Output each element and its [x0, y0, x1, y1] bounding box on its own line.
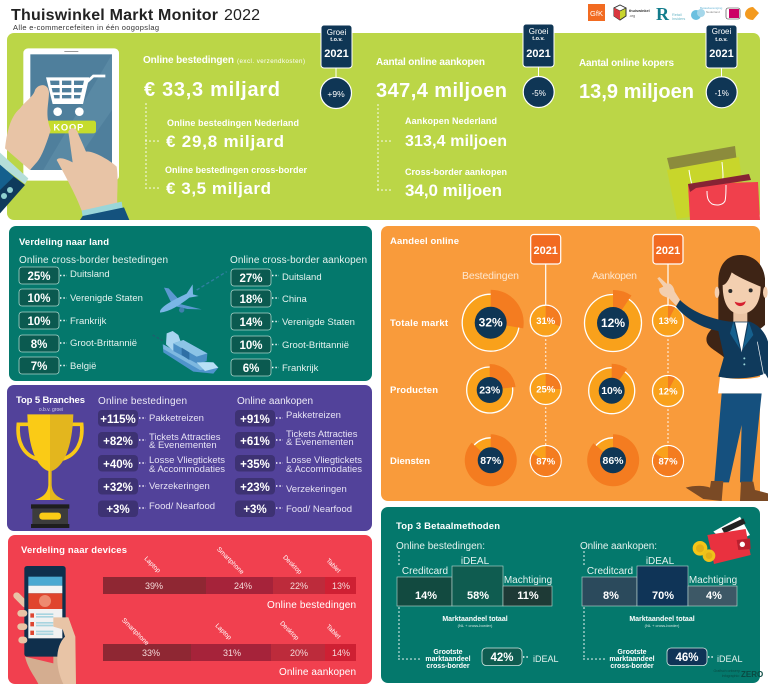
- shirt hem: [718, 376, 763, 393]
- badge: growth spending +9%: t.o.v.: [330, 37, 343, 43]
- text: online spending: Online bestedingen Nederland: [167, 118, 299, 128]
- bar chart: purchases: 31%: [223, 648, 241, 658]
- right column: +3%: [243, 504, 267, 516]
- heading: Top 5 Branches: [16, 395, 85, 406]
- left column: Tickets Attracties: [149, 432, 221, 443]
- panel: distribution by device: [8, 535, 372, 684]
- text: online purchases: [376, 57, 507, 200]
- partner logos: R: [656, 4, 670, 24]
- right column: Online cross-border aankopen: [230, 255, 367, 266]
- donut: producten aankopen 10%: [589, 364, 635, 414]
- heading: Aandeel online: [390, 236, 459, 247]
- right column: Online aankopen: [237, 396, 313, 407]
- donut: diensten bestedingen 87%: 87%: [480, 455, 502, 467]
- left column: 8%: [31, 339, 47, 351]
- panel: online spending and buyers: [0, 24, 760, 220]
- bar chart: spending: Smartphone: [215, 546, 245, 576]
- chart: payment purchases: (NL + cross-border): [645, 623, 680, 628]
- chart: payment purchases: Creditcard: [587, 566, 633, 577]
- chart: payment purchases: 8%: [603, 590, 619, 602]
- badge: growth purchases -5%: -5%: [532, 89, 546, 98]
- donut: totale markt bestedingen 32%: 32%: [479, 316, 503, 330]
- donut: producten bestedingen 23%: 23%: [479, 384, 501, 396]
- badge: growth purchases -5%: [523, 24, 554, 108]
- left column: Online bestedingen: [98, 396, 187, 407]
- donut: producten 2021 12%: [652, 376, 684, 406]
- right column: +23%: [240, 482, 270, 494]
- right column: China: [282, 294, 308, 305]
- chart: payment spending: 11%: [517, 590, 539, 602]
- face: [723, 272, 761, 314]
- bar chart: purchases: Smartphone: [120, 617, 150, 647]
- bar chart: purchases: 20%: [290, 648, 308, 658]
- left column: Losse Vliegtickets: [149, 455, 225, 466]
- bar chart: spending: 13%: [332, 581, 350, 591]
- chart: payment purchases: Online aankopen:: [580, 541, 657, 552]
- donut: totale markt aankopen 12%: [584, 290, 642, 352]
- bar chart: spending: Online bestedingen: [267, 600, 356, 611]
- icon: trophy: [18, 414, 82, 528]
- partner logos: .org: [629, 14, 635, 18]
- chart: payment spending: Machtiging: [504, 575, 552, 586]
- text: online spending: € 33,3 miljard: [144, 79, 280, 101]
- text: online buyers: [579, 58, 694, 103]
- right sleeve: [80, 207, 129, 220]
- right column: +61%: [240, 436, 270, 448]
- badge: 2021 aankopen: 2021: [656, 245, 680, 257]
- icon: tablet with hands: [0, 48, 129, 220]
- donut: producten aankopen 10%: 10%: [601, 385, 623, 397]
- bar chart: purchases: 14%: [332, 648, 350, 658]
- donut: producten 2021 12%: 12%: [658, 386, 678, 398]
- chart: payment purchases: marktaandeel: [609, 656, 655, 663]
- right column: [230, 255, 367, 376]
- badge: growth spending +9%: 2021: [324, 48, 349, 60]
- left column: Online cross-border bestedingen: [19, 255, 168, 266]
- donut: totale markt 2021 31%: [530, 305, 561, 336]
- chart: payment spending: [396, 541, 559, 670]
- chart: payment spending: Marktaandeel totaal: [442, 616, 508, 623]
- left column: Food/ Nearfood: [149, 501, 215, 512]
- badge: growth buyers -1%: t.o.v.: [715, 37, 728, 43]
- right column: 6%: [243, 363, 259, 375]
- left column: [98, 396, 225, 517]
- chart: payment purchases: 70%: [652, 590, 674, 602]
- left column: +3%: [106, 504, 130, 516]
- text: online purchases: 347,4 miljoen: [376, 80, 507, 102]
- heading: [16, 395, 85, 413]
- donut: producten 2021 25%: [530, 374, 561, 404]
- left column: Frankrijk: [70, 316, 107, 327]
- hair: [706, 255, 765, 358]
- icon: airplane: [160, 272, 227, 313]
- chart: payment spending: Creditcard: [402, 566, 448, 577]
- text: online buyers: 13,9 miljoen: [579, 81, 694, 103]
- bar chart: spending: 24%: [234, 581, 252, 591]
- left column: +40%: [103, 459, 133, 471]
- left hand: [5, 85, 51, 170]
- left column: +32%: [103, 482, 133, 494]
- lapels: [730, 322, 753, 349]
- right column: 14%: [239, 317, 263, 329]
- panel: online share: [381, 226, 768, 501]
- text: online spending: € 3,5 miljard: [166, 179, 271, 198]
- donut: producten bestedingen 23%: [467, 364, 516, 413]
- right cuff: [82, 202, 123, 217]
- left column: 25%: [27, 271, 51, 283]
- badge: 2021 bestedingen: [531, 234, 561, 264]
- badge: growth purchases -5%: 2021: [526, 48, 551, 60]
- right column: 18%: [239, 294, 263, 306]
- partner logos: Nederland: [706, 10, 720, 14]
- bar chart: spending: 22%: [290, 581, 308, 591]
- left column: & Evenementen: [149, 440, 217, 451]
- chart: payment purchases: Grootste: [617, 649, 647, 656]
- badge: growth buyers -1%: Groei: [712, 27, 732, 36]
- donut: diensten 2021 87% aankopen: 87%: [658, 456, 678, 468]
- bar chart: spending: Laptop: [143, 555, 162, 575]
- badge: growth buyers -1%: 2021: [709, 48, 734, 60]
- left sleeve: [0, 153, 28, 184]
- right column: Verzekeringen: [286, 484, 347, 495]
- text: online purchases: 313,4 miljoen: [405, 133, 507, 150]
- bar chart: purchases: [103, 617, 356, 678]
- credit: infographic designer: Grafisch ontwerp: [714, 669, 740, 673]
- row labels: Totale markt: [390, 318, 449, 329]
- shirt: [735, 322, 747, 352]
- connectors: [546, 264, 668, 305]
- text: online purchases: Aantal online aankopen: [376, 57, 485, 68]
- panel: top 3 payment methods: [381, 507, 763, 683]
- donut: diensten 2021 87%: [530, 446, 561, 476]
- partner logos: GfK: [590, 9, 603, 18]
- partner logos: Betaalvereniging: [700, 6, 723, 10]
- partner logos: Retail: [672, 13, 682, 17]
- icon: shopping bags: [667, 146, 760, 220]
- left column: Duitsland: [70, 269, 110, 280]
- text: online spending: Online bestedingen: [143, 55, 234, 66]
- panel: distribution by country: [9, 226, 372, 381]
- credit: infographic designer: ZERO: [741, 670, 763, 679]
- partner logos: Insiders: [672, 17, 685, 21]
- text: online purchases: Cross-border aankopen: [405, 167, 507, 177]
- left column: 7%: [31, 361, 47, 373]
- panel: top 5 branches: [7, 385, 372, 531]
- button: koop: KOOP: [53, 122, 83, 132]
- left column: +82%: [103, 436, 133, 448]
- right column: Verenigde Staten: [282, 317, 355, 328]
- right column: & Evenementen: [286, 437, 354, 448]
- chart: payment spending: (NL + cross-border): [458, 623, 493, 628]
- column labels: Bestedingen: [462, 270, 519, 282]
- right column: Pakketreizen: [286, 410, 341, 421]
- icon: hand holding phone: [17, 566, 76, 684]
- badge: growth buyers -1%: [706, 25, 737, 108]
- illustration: woman pointing: [657, 255, 768, 501]
- heading: o.b.v. groei: [39, 407, 63, 413]
- credit: infographic designer: [714, 669, 763, 679]
- row labels: Producten: [390, 385, 438, 396]
- bar chart: purchases: 33%: [142, 648, 160, 658]
- chart: payment spending: iDEAL: [533, 654, 559, 664]
- badge: growth spending +9%: +9%: [327, 89, 345, 99]
- left column: België: [70, 361, 96, 372]
- hand: [657, 277, 680, 306]
- neck: [733, 308, 747, 325]
- badge: growth purchases -5%: Groei: [529, 27, 549, 36]
- left column: [19, 255, 168, 374]
- column labels: Aankopen: [592, 270, 637, 282]
- icon: shopping cart: [46, 76, 105, 116]
- text: online purchases: Aankopen Nederland: [405, 116, 497, 126]
- donut: diensten 2021 87% aankopen: [652, 446, 684, 476]
- chart: payment purchases: cross-border: [610, 663, 654, 670]
- chart: payment spending: iDEAL: [461, 556, 490, 567]
- text: online spending: [143, 55, 307, 198]
- left column: 10%: [27, 293, 51, 305]
- jacket: [676, 300, 768, 378]
- donut: totale markt aankopen 12%: 12%: [601, 316, 625, 330]
- chart: payment spending: 42%: [490, 652, 514, 664]
- right column: Food/ Nearfood: [286, 504, 352, 515]
- text: online spending: € 29,8 miljard: [166, 132, 284, 151]
- chart: payment spending: marktaandeel: [425, 656, 471, 663]
- icon: container ship: [153, 331, 218, 374]
- chart: payment purchases: iDEAL: [646, 556, 675, 567]
- right column: Duitsland: [282, 272, 322, 283]
- right column: 10%: [239, 340, 263, 352]
- right column: & Accommodaties: [286, 464, 362, 475]
- donut: totale markt 2021 13%: 13%: [658, 316, 678, 327]
- subtitle: Alle e-commercefeiten in één oogopslag: [13, 23, 159, 32]
- right column: Groot-Brittannië: [282, 340, 349, 351]
- partner logos: thuiswinkel: [629, 9, 650, 13]
- badge: growth spending +9%: [320, 25, 352, 108]
- left column: Verenigde Staten: [70, 293, 143, 304]
- bar chart: spending: Tablet: [324, 557, 342, 575]
- heading: Verdeling naar devices: [21, 545, 127, 556]
- chart: payment spending: Grootste: [433, 649, 463, 656]
- sleeve edge: [757, 342, 764, 377]
- donut: diensten aankopen 86%: [587, 434, 639, 486]
- right column: 27%: [239, 273, 263, 285]
- badge: 2021 bestedingen: 2021: [533, 245, 558, 257]
- donut: totale markt 2021 31%: 31%: [536, 316, 556, 327]
- right column: Frankrijk: [282, 363, 319, 374]
- right column: Tickets Attracties: [286, 429, 358, 440]
- heading: Top 3 Betaalmethoden: [396, 521, 500, 532]
- badge: growth purchases -5%: t.o.v.: [532, 36, 545, 42]
- left column: & Accommodaties: [149, 464, 225, 475]
- chart: payment purchases: 46%: [675, 652, 699, 664]
- bar chart: purchases: Laptop: [214, 622, 233, 642]
- bar chart: spending: 39%: [145, 581, 163, 591]
- left column: Groot-Brittannië: [70, 338, 137, 349]
- bar chart: spending: [103, 546, 356, 611]
- left column: 10%: [27, 316, 51, 328]
- right column: +91%: [240, 414, 270, 426]
- left column: +115%: [100, 414, 136, 426]
- ears: [715, 287, 719, 298]
- donut: diensten 2021 87%: 87%: [536, 456, 556, 468]
- donut: totale markt 2021 13%: [652, 305, 684, 336]
- text: online purchases: 34,0 miljoen: [405, 181, 502, 200]
- text: online buyers: Aantal online kopers: [579, 58, 674, 69]
- badge: growth buyers -1%: -1%: [715, 89, 729, 98]
- heading: Verdeling naar land: [19, 237, 109, 248]
- button: koop: [45, 121, 96, 133]
- title: 2022: [224, 7, 260, 24]
- bar chart: purchases: Tablet: [324, 623, 342, 641]
- chart: payment spending: 58%: [467, 590, 489, 602]
- right column: +35%: [240, 459, 270, 471]
- left column: Verzekeringen: [149, 481, 210, 492]
- title: Thuiswinkel Markt Monitor: [11, 7, 218, 24]
- column labels: [462, 270, 637, 282]
- legs and boots: [686, 393, 768, 501]
- bar chart: purchases: Desktop: [278, 620, 300, 642]
- icon: wallet and coins: [693, 517, 751, 564]
- credit: infographic designer: Infographic:: [722, 674, 740, 678]
- partner logos: [588, 4, 759, 24]
- left column: Pakketreizen: [149, 413, 204, 424]
- chart: payment spending: 14%: [415, 590, 437, 602]
- row labels: [390, 318, 449, 467]
- upper body: [657, 255, 768, 393]
- right column: Losse Vliegtickets: [286, 455, 362, 466]
- donut: producten 2021 25%: 25%: [536, 384, 556, 396]
- right hand: [57, 128, 118, 211]
- chart: payment purchases: iDEAL: [717, 654, 743, 664]
- badge: 2021 aankopen: [653, 234, 683, 264]
- chart: payment purchases: 4%: [706, 590, 722, 602]
- badge: growth spending +9%: Groei: [327, 28, 347, 37]
- chart: payment spending: cross-border: [426, 663, 470, 670]
- right column: [235, 396, 362, 517]
- chart: payment purchases: [580, 541, 743, 670]
- row labels: Diensten: [390, 456, 430, 467]
- bar chart: spending: Desktop: [281, 554, 303, 576]
- donut: diensten bestedingen 87%: [465, 434, 517, 486]
- bar chart: purchases: Online aankopen: [279, 667, 356, 678]
- donut: diensten aankopen 86%: 86%: [602, 455, 624, 467]
- text: online spending: Online bestedingen cross-border: [165, 165, 307, 175]
- chart: payment purchases: Machtiging: [689, 575, 737, 586]
- text: online spending: (excl. verzendkosten): [237, 58, 305, 65]
- chart: payment spending: Online bestedingen:: [396, 541, 485, 552]
- chart: payment purchases: Marktaandeel totaal: [629, 616, 695, 623]
- donut: totale markt bestedingen 32%: [462, 290, 524, 351]
